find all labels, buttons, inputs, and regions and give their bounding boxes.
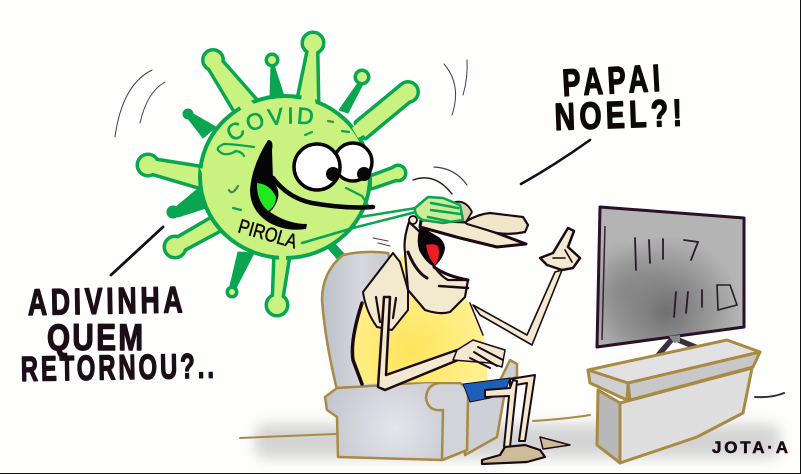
lower beak bbox=[420, 220, 526, 247]
label: PIROLA: PIROLA bbox=[236, 216, 300, 253]
cabinet lip side bbox=[588, 370, 628, 400]
armchair bbox=[322, 252, 517, 460]
dark spikes bbox=[167, 65, 364, 292]
mouth bbox=[250, 140, 307, 230]
caption: virus speech: RETORNOU?.. bbox=[20, 347, 214, 389]
chair back bbox=[322, 252, 400, 390]
eye left bbox=[294, 144, 340, 190]
leg front bbox=[485, 380, 517, 447]
tongue bbox=[426, 244, 439, 265]
man bbox=[352, 202, 580, 464]
shoe back bbox=[540, 437, 570, 449]
cabinet top bbox=[588, 340, 760, 383]
virus arm bbox=[302, 208, 416, 243]
spike fills bbox=[139, 34, 416, 314]
virus body bbox=[200, 96, 370, 258]
cabinet lip front bbox=[628, 352, 760, 400]
tv stand legs bbox=[648, 338, 710, 367]
caption: virus speech: ADIVINHA bbox=[27, 279, 183, 323]
leg back bbox=[510, 375, 535, 441]
caption: man speech: NOEL?! bbox=[554, 93, 683, 139]
arm left bbox=[378, 297, 458, 390]
tank top bbox=[353, 252, 488, 384]
label: COVID: COVID bbox=[227, 107, 313, 140]
nose bbox=[465, 213, 528, 234]
tv cabinet bbox=[588, 340, 760, 463]
hand left bbox=[453, 340, 505, 367]
spike bases bbox=[200, 94, 369, 264]
lower jaw line bbox=[434, 267, 468, 280]
floor shadow bbox=[255, 424, 780, 458]
tv scribbles bbox=[635, 238, 737, 317]
shoulder bbox=[363, 253, 408, 330]
speech tail: virus bbox=[111, 227, 163, 275]
floor lines bbox=[240, 393, 784, 438]
speech tail: man bbox=[521, 140, 590, 184]
cabinet side bbox=[597, 390, 620, 463]
tongue bbox=[257, 183, 276, 211]
pupils bbox=[326, 167, 371, 181]
caption: man speech: PAPAI bbox=[561, 58, 661, 105]
neck and chest bbox=[404, 222, 468, 313]
shoe front bbox=[482, 445, 545, 464]
eye right bbox=[334, 143, 372, 181]
cabinet front bbox=[620, 368, 752, 463]
hand pointing bbox=[540, 228, 580, 270]
chair seat bbox=[325, 382, 468, 460]
arm pointing bbox=[473, 270, 562, 345]
shorts bbox=[463, 378, 510, 402]
tv screen bbox=[597, 207, 744, 347]
virus bbox=[136, 30, 420, 318]
caption: virus speech bbox=[20, 279, 214, 389]
open mouth bbox=[418, 226, 445, 267]
virus skin marks bbox=[218, 121, 369, 210]
spike outlines bbox=[139, 34, 416, 314]
caption: virus speech: QUEM bbox=[47, 318, 143, 359]
chair right side bbox=[465, 360, 517, 455]
ear bbox=[409, 216, 417, 224]
hat tip behind hand bbox=[452, 202, 472, 222]
caption: man speech bbox=[554, 58, 683, 139]
motion lines bbox=[115, 60, 467, 246]
chair arm bbox=[426, 383, 468, 460]
television bbox=[597, 207, 744, 367]
virus hand bbox=[415, 197, 463, 223]
signature: JOTA·A bbox=[712, 438, 788, 457]
smile bbox=[273, 178, 373, 208]
